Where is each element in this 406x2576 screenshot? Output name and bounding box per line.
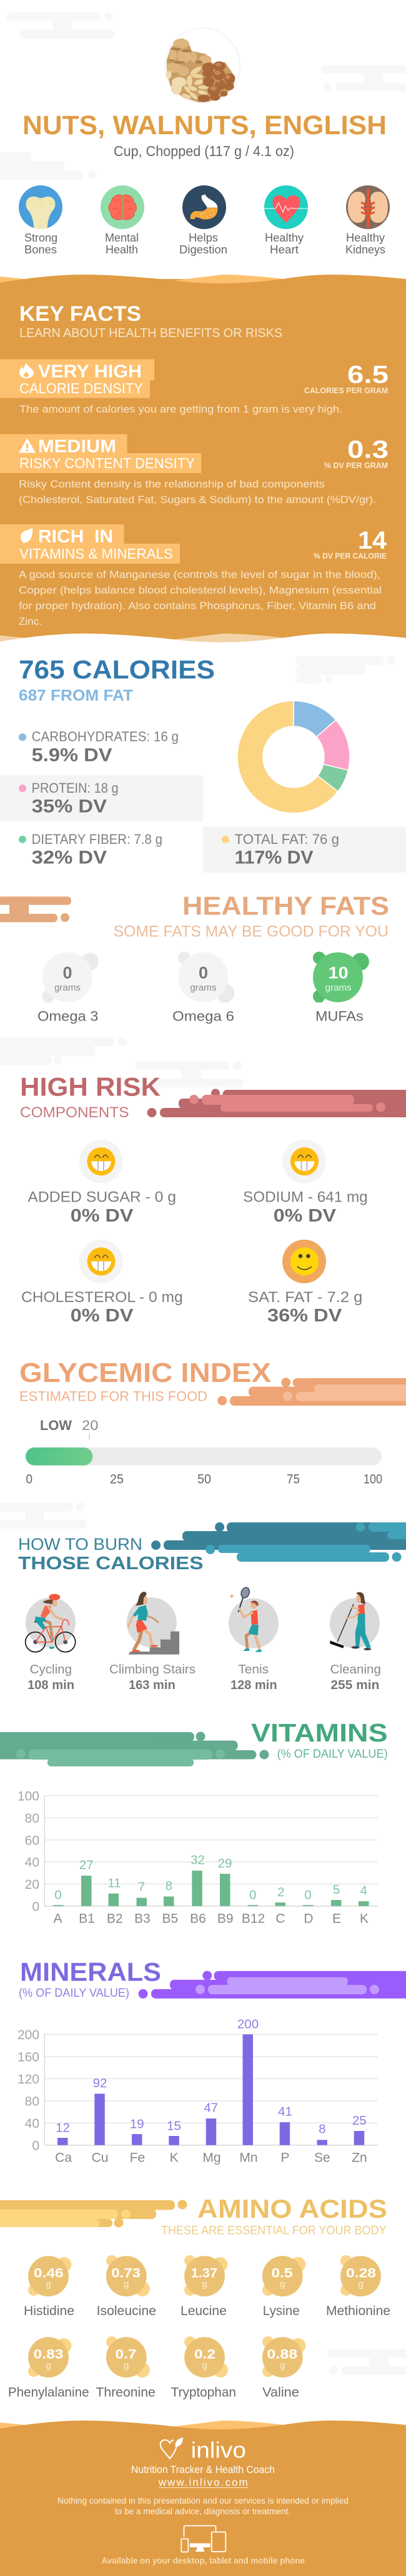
chart: vitamins bar chart: B9 xyxy=(217,1912,234,1926)
amino: methionine: g xyxy=(358,2279,364,2290)
legend: protein: 35% DV xyxy=(32,796,107,816)
chart: minerals bar chart: 200 xyxy=(237,2017,259,2031)
legend: dietary fiber: DIETARY FIBER: 7.8 g xyxy=(32,831,162,847)
chart: vitamins bar chart: 0 xyxy=(54,1888,62,1903)
chart: minerals bar chart: 41 xyxy=(278,2104,292,2118)
chart: vitamins bar chart: 20 xyxy=(25,1878,39,1892)
tagline: Nutrition Tracker & Health Coach xyxy=(131,2464,275,2476)
amino: histidine: 0.46 xyxy=(34,2266,64,2281)
fact: calorie density: The amount of calories you are getting from 1 gram is very high. xyxy=(19,403,342,415)
amino: valine xyxy=(262,2336,305,2399)
amino: histidine xyxy=(24,2256,74,2318)
panel: high risk components xyxy=(0,1037,406,1326)
icon: strong bones: Bones xyxy=(24,243,57,256)
stat: omega 6: grams xyxy=(190,982,217,993)
fact: rich in vitamins and minerals xyxy=(0,524,387,627)
chart: vitamins bar chart: 27 xyxy=(79,1858,94,1873)
activity: tennis xyxy=(229,1586,279,1692)
fact: calorie density: CALORIE DENSITY xyxy=(19,380,143,396)
chart: minerals bar chart: 200 xyxy=(17,2028,39,2042)
component: sodium: 0% DV xyxy=(274,1206,337,1226)
amino: tryptophan: 0.2 xyxy=(194,2347,215,2362)
amino: tryptophan: Tryptophan xyxy=(171,2386,236,2399)
amino: histidine: g xyxy=(46,2279,51,2290)
disclaimer: Nothing contained in this presentation and our services is intended or implied xyxy=(57,2495,349,2505)
component: cholesterol: 0% DV xyxy=(71,1306,134,1326)
fact: rich in vitamins and minerals: Copper (helps balance blood cholesterol levels), Magnesium (essential xyxy=(19,584,382,596)
amino: lysine: Lysine xyxy=(263,2304,300,2318)
panel: glycemic index xyxy=(19,1358,406,1486)
disclaimer xyxy=(57,2495,349,2516)
logo: inlivo: inlivo xyxy=(191,2437,246,2463)
gauge: glycemic index: 50 xyxy=(197,1472,211,1486)
gauge: glycemic index: 25 xyxy=(110,1472,124,1486)
amino: phenylalanine: 0.83 xyxy=(34,2347,64,2362)
amino: methionine: Methionine xyxy=(326,2304,390,2318)
component: added sugar xyxy=(27,1140,176,1226)
chart: vitamins bar chart: B6 xyxy=(190,1912,206,1926)
fact: risky content density xyxy=(0,434,389,506)
chart: minerals bar chart: 160 xyxy=(17,2050,39,2065)
fact: rich in vitamins and minerals: for proper hydration). Also contains Phosphorus, Fiber, Vitamin B6 and xyxy=(19,600,376,612)
chart: vitamins bar chart: 7 xyxy=(138,1880,145,1894)
amino: lysine: 0.5 xyxy=(271,2266,293,2281)
chart: vitamins bar chart: B1 xyxy=(79,1912,95,1926)
subheading: percent daily value: (% OF DAILY VALUE) xyxy=(277,1747,388,1761)
gauge: glycemic index: LOW xyxy=(40,1418,72,1433)
fact: risky content density: % DV PER GRAM xyxy=(324,461,388,470)
chart: minerals bar chart: Zn xyxy=(352,2150,367,2165)
amino: phenylalanine: Phenylalanine xyxy=(8,2386,89,2399)
icon: healthy kidneys xyxy=(345,185,390,256)
chart: vitamins bar chart: 29 xyxy=(218,1856,232,1871)
icon: helps digestion: Helps xyxy=(189,232,218,244)
heading: amino acids: AMINO ACIDS xyxy=(197,2194,387,2223)
fact: calorie density: CALORIES PER GRAM xyxy=(304,386,388,395)
stat: omega 6: Omega 6 xyxy=(172,1008,234,1024)
chart: vitamins bar chart: E xyxy=(332,1912,341,1926)
component: cholesterol: CHOLESTEROL - 0 mg xyxy=(21,1289,183,1306)
fact: rich in vitamins and minerals: VITAMINS & MINERALS xyxy=(19,546,173,562)
chart: macronutrient donut xyxy=(237,701,350,813)
chart: vitamins bar chart: 60 xyxy=(25,1833,39,1848)
legend: total fat: 117% DV xyxy=(235,847,314,868)
panel: key facts xyxy=(0,275,406,652)
component: added sugar: ADDED SUGAR - 0 g xyxy=(27,1189,176,1206)
fact: risky content density: MEDIUM xyxy=(38,437,116,457)
subheading: components: COMPONENTS xyxy=(20,1104,129,1121)
component: sodium xyxy=(243,1140,368,1226)
stat: omega 6: 0 xyxy=(199,964,208,982)
chart: minerals bar chart: Fe xyxy=(130,2150,145,2165)
stat: omega 6 xyxy=(172,952,235,1024)
icon: mental health xyxy=(101,185,144,256)
activity: climbing stairs: 163 min xyxy=(129,1678,176,1692)
panel: vitamins xyxy=(0,1718,388,1926)
amino: isoleucine: Isoleucine xyxy=(97,2304,156,2318)
panel: minerals xyxy=(17,1957,406,2165)
banner: healthy fats xyxy=(0,896,71,923)
component: saturated fat: 36% DV xyxy=(267,1306,342,1326)
fact: risky content density: (Cholesterol, Saturated Fat, Sugars & Sodium) to the amount (%DV/gr). xyxy=(19,494,376,506)
stat: omega 3 xyxy=(37,953,99,1024)
amino: phenylalanine xyxy=(8,2337,89,2399)
heading: glycemic index: GLYCEMIC INDEX xyxy=(19,1358,271,1388)
stat: omega 3: grams xyxy=(54,982,81,993)
subheading: essential: THESE ARE ESSENTIAL FOR YOUR BODY xyxy=(161,2223,387,2237)
chart: vitamins bar chart: K xyxy=(360,1912,369,1926)
icon: healthy heart xyxy=(264,185,308,256)
amino: leucine: 1.37 xyxy=(191,2266,217,2281)
icon: strong bones: Strong xyxy=(24,232,57,244)
icon: mental health: Health xyxy=(106,243,138,256)
heading: vitamins: VITAMINS xyxy=(251,1718,388,1747)
chart: vitamins bar chart: 0 xyxy=(249,1888,256,1903)
icon: healthy heart: Healthy xyxy=(265,232,304,244)
activity: climbing stairs xyxy=(109,1592,196,1692)
chart: minerals bar chart: Se xyxy=(314,2150,330,2165)
amino: methionine xyxy=(326,2255,390,2318)
fact: risky content density: 0.3 xyxy=(347,436,389,463)
subheading: calories from fat: 687 FROM FAT xyxy=(19,687,133,705)
fact: calorie density: 6.5 xyxy=(347,361,389,388)
title: NUTS, WALNUTS, ENGLISH xyxy=(22,110,387,140)
amino: threonine: Threonine xyxy=(96,2386,156,2399)
stat: MUFAs: 10 xyxy=(329,964,349,982)
component: saturated fat: SAT. FAT - 7.2 g xyxy=(248,1289,362,1306)
panel: amino acids xyxy=(0,2194,406,2399)
chart: vitamins bar chart: D xyxy=(304,1912,314,1926)
chart: minerals bar chart: 8 xyxy=(319,2122,326,2137)
website link: www.inlivo.com xyxy=(158,2477,248,2488)
stat: MUFAs: MUFAs xyxy=(315,1008,364,1024)
chart: minerals bar chart: 80 xyxy=(25,2094,39,2108)
chart: minerals bar chart: 12 xyxy=(56,2120,70,2135)
fact: rich in vitamins and minerals: A good source of Manganese (controls the level of sugar in the blood), xyxy=(19,569,380,580)
subheading: key facts: LEARN ABOUT HEALTH BENEFITS OR RISKS xyxy=(19,326,282,340)
heading: calories: 765 CALORIES xyxy=(19,655,215,684)
amino: isoleucine: g xyxy=(124,2279,129,2290)
chart: vitamins bar chart: 11 xyxy=(107,1876,121,1890)
fact: rich in vitamins and minerals: % DV PER CALORIE xyxy=(314,551,387,561)
disclaimer: to be a medical advice, diagnosis or treatment. xyxy=(115,2506,290,2516)
chart: minerals bar chart: 15 xyxy=(167,2118,181,2133)
banner: burn calories xyxy=(151,1522,406,1562)
heading: high risk: HIGH RISK xyxy=(20,1072,161,1102)
subheading: estimated: ESTIMATED FOR THIS FOOD xyxy=(19,1389,207,1404)
icon: strong bones xyxy=(19,185,62,256)
legend: total fat: TOTAL FAT: 76 g xyxy=(235,831,339,847)
chart: vitamins bar chart: 8 xyxy=(166,1879,172,1893)
chart: minerals bar chart: Mg xyxy=(202,2150,221,2165)
gauge: glycemic index xyxy=(26,1418,382,1486)
chart: vitamins bar chart: A xyxy=(53,1912,62,1926)
stat: omega 3: Omega 3 xyxy=(37,1008,99,1024)
fact: calorie density: VERY HIGH xyxy=(38,362,142,382)
gauge: glycemic index: 0 xyxy=(26,1472,32,1486)
fact: risky content density: RISKY CONTENT DENSITY xyxy=(19,455,195,471)
component: added sugar: 0% DV xyxy=(71,1206,134,1226)
fact: risky content density: Risky Content density is the relationship of bad components xyxy=(19,478,325,490)
amino: threonine: 0.7 xyxy=(115,2347,136,2362)
chart: vitamins bar chart: 80 xyxy=(25,1811,39,1826)
legend: total fat xyxy=(222,831,339,868)
amino: valine: g xyxy=(280,2361,285,2371)
chart: minerals bar chart: 47 xyxy=(204,2100,218,2115)
heading: minerals: MINERALS xyxy=(20,1957,161,1986)
chart: vitamins bar chart: B2 xyxy=(107,1912,123,1926)
amino: tryptophan xyxy=(171,2336,236,2399)
amino: valine: 0.88 xyxy=(267,2347,298,2362)
component: sodium: SODIUM - 641 mg xyxy=(243,1189,368,1206)
activity: climbing stairs: Climbing Stairs xyxy=(109,1663,196,1677)
gauge: glycemic index: 100 xyxy=(364,1472,382,1486)
activity: cycling xyxy=(26,1594,76,1692)
fact: rich in vitamins and minerals: Zinc. xyxy=(19,615,42,627)
gauge: glycemic index: 20 xyxy=(82,1418,99,1433)
chart: vitamins bar chart: 100 xyxy=(17,1789,39,1804)
amino: isoleucine: 0.73 xyxy=(111,2266,141,2281)
heading: those calories: THOSE CALORIES xyxy=(18,1554,204,1574)
chart: minerals bar chart: 120 xyxy=(17,2072,39,2087)
chart: minerals bar chart: 40 xyxy=(25,2117,39,2131)
chart: minerals bar chart: 0 xyxy=(32,2138,39,2153)
legend: protein xyxy=(19,780,119,816)
icon: devices xyxy=(181,2525,225,2552)
chart: minerals bar chart: K xyxy=(170,2150,179,2165)
chart: vitamins bar chart: B3 xyxy=(134,1912,151,1926)
subheading: healthy fats: SOME FATS MAY BE GOOD FOR YOU xyxy=(114,923,389,941)
component: cholesterol xyxy=(21,1240,183,1326)
chart: minerals bar chart: 92 xyxy=(93,2076,107,2090)
stat: omega 3: 0 xyxy=(62,964,72,982)
amino: valine: Valine xyxy=(262,2386,299,2399)
fact: rich in vitamins and minerals: 14 xyxy=(358,527,387,554)
amino: leucine: g xyxy=(202,2279,207,2290)
component: saturated fat xyxy=(248,1240,362,1326)
banner: high risk xyxy=(147,1089,406,1117)
activity: cleaning xyxy=(330,1592,381,1692)
icon: mental health: Mental xyxy=(105,232,139,244)
icon: helps digestion xyxy=(179,185,227,256)
amino: isoleucine xyxy=(97,2255,156,2318)
legend: dietary fiber xyxy=(19,831,162,868)
chart: vitamins bar chart: 32 xyxy=(191,1853,205,1868)
panel: calories xyxy=(0,655,406,873)
icon: healthy kidneys: Kidneys xyxy=(345,243,385,256)
activity: cycling: Cycling xyxy=(30,1663,72,1677)
chart: vitamins bar chart: 40 xyxy=(25,1856,39,1870)
activity: cycling: 108 min xyxy=(27,1678,74,1692)
icon: helps digestion: Digestion xyxy=(179,243,227,256)
panel: healthy fats xyxy=(0,891,389,1024)
subtitle: serving size: Cup, Chopped (117 g / 4.1 oz) xyxy=(114,143,294,159)
stat: MUFAs xyxy=(313,952,369,1024)
heading: key facts: KEY FACTS xyxy=(19,302,141,326)
chart: vitamins bar chart: 5 xyxy=(333,1883,340,1897)
chart: vitamins bar chart xyxy=(17,1789,378,1926)
chart: vitamins bar chart: B5 xyxy=(162,1912,178,1926)
availability note: Available on your desktop, tablet and mobile phone xyxy=(101,2556,305,2565)
amino: phenylalanine: g xyxy=(46,2361,51,2371)
fact: calorie density xyxy=(0,360,389,415)
stat: MUFAs: grams xyxy=(325,982,352,993)
amino: leucine: Leucine xyxy=(181,2304,227,2318)
footer xyxy=(0,2421,406,2576)
chart: minerals bar chart: 25 xyxy=(352,2113,367,2128)
chart: minerals bar chart: Ca xyxy=(55,2150,72,2165)
chart: vitamins bar chart: 0 xyxy=(32,1900,39,1914)
legend: carbohydrates: 5.9% DV xyxy=(32,745,112,765)
heading: how to burn: HOW TO BURN xyxy=(18,1535,142,1554)
banner: amino acids xyxy=(0,2200,187,2227)
chart: minerals bar chart: Mn xyxy=(239,2150,258,2165)
banner: vitamins xyxy=(0,1731,269,1766)
icon: healthy heart: Heart xyxy=(270,243,299,256)
legend: protein: PROTEIN: 18 g xyxy=(32,780,119,796)
chart: vitamins bar chart: 2 xyxy=(277,1885,285,1899)
chart: minerals bar chart: Cu xyxy=(92,2150,108,2165)
amino: methionine: 0.28 xyxy=(346,2266,376,2281)
chart: minerals bar chart: P xyxy=(280,2150,290,2165)
gauge: glycemic index: 75 xyxy=(287,1472,300,1486)
icon: healthy kidneys: Healthy xyxy=(346,232,385,244)
chart: vitamins bar chart: C xyxy=(275,1912,285,1926)
amino: threonine: g xyxy=(124,2361,129,2371)
activity: tennis: Tenis xyxy=(238,1663,269,1677)
activity: tennis: 128 min xyxy=(230,1678,277,1692)
legend: carbohydrates xyxy=(19,729,179,765)
banner: glycemic index xyxy=(217,1378,406,1406)
food photo: mixed nuts xyxy=(165,28,240,103)
amino: lysine: g xyxy=(280,2279,285,2290)
activity: cleaning: 255 min xyxy=(330,1678,379,1692)
activity: cleaning: Cleaning xyxy=(330,1663,381,1677)
chart: minerals bar chart: 19 xyxy=(130,2117,144,2131)
heading: healthy fats: HEALTHY FATS xyxy=(182,891,389,921)
panel: how to burn those calories xyxy=(0,1502,406,1692)
amino: tryptophan: g xyxy=(202,2361,207,2371)
amino: lysine xyxy=(262,2256,305,2318)
legend: carbohydrates: CARBOHYDRATES: 16 g xyxy=(32,729,179,745)
background clouds: header xyxy=(0,12,406,180)
amino: threonine xyxy=(96,2336,156,2399)
chart: vitamins bar chart: 0 xyxy=(304,1888,312,1903)
chart: vitamins bar chart: B12 xyxy=(242,1912,265,1926)
banner: minerals xyxy=(139,1971,406,1999)
chart: minerals bar chart xyxy=(17,2017,378,2165)
amino: leucine xyxy=(181,2255,227,2318)
amino: histidine: Histidine xyxy=(24,2304,74,2318)
legend: dietary fiber: 32% DV xyxy=(32,847,107,868)
chart: vitamins bar chart: 4 xyxy=(360,1884,367,1898)
subheading: percent daily value: (% OF DAILY VALUE) xyxy=(19,1986,129,2000)
fact: rich in vitamins and minerals: RICH IN xyxy=(38,527,113,547)
benefit icons row xyxy=(19,185,390,256)
logo: inlivo xyxy=(161,2437,246,2463)
